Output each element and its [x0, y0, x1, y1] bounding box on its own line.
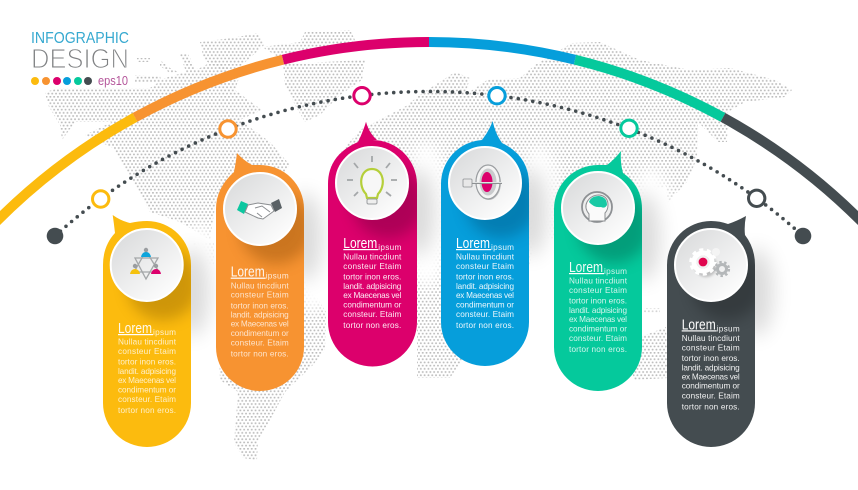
body text magenta: tortor non eros. — [343, 321, 401, 330]
body text yellow: ex Maecenas vel — [118, 376, 176, 385]
capsule yellow — [103, 215, 191, 447]
capsule blue — [441, 121, 529, 366]
body text orange: ex Maecenas vel — [231, 320, 289, 329]
capsule magenta — [328, 122, 417, 366]
body text dark: condimentum or — [682, 382, 740, 391]
circle shadow magenta — [352, 166, 424, 238]
arc segment blue — [429, 42, 575, 60]
panel: blue — [441, 121, 537, 366]
icon disc yellow — [111, 229, 183, 301]
body text green: tortor inon eros. — [569, 297, 627, 306]
body text orange — [231, 281, 289, 359]
body text magenta: condimentum or — [343, 300, 402, 309]
body text magenta: landit. adpisicing — [343, 282, 402, 291]
body text yellow: condimentum or — [118, 385, 176, 394]
panel: yellow — [103, 215, 199, 447]
dotted world map — [45, 30, 792, 460]
heading magenta: Lorem — [343, 235, 377, 252]
colour dots legend — [31, 77, 92, 85]
ring magenta — [354, 88, 370, 104]
icon disc green — [562, 172, 634, 244]
body text dark: ex Maecenas vel — [682, 372, 740, 381]
ring blue — [489, 88, 505, 104]
body text orange: tortor inon eros. — [231, 301, 289, 310]
body text dark: landit. adpisicing — [682, 363, 740, 372]
body text magenta: tortor inon eros. — [343, 273, 401, 282]
heading orange: ipsum — [266, 272, 289, 281]
ring orange — [220, 121, 236, 137]
heading blue: Lorem — [456, 235, 490, 252]
circle shadow green — [578, 191, 650, 263]
timeline rings — [92, 88, 765, 207]
body text magenta: consteur Etaim — [343, 262, 401, 271]
body text blue: ex Maecenas vel — [456, 291, 514, 300]
icon: gears — [691, 248, 729, 277]
title: infographic: INFOGRAPHIC — [31, 30, 129, 47]
body text green: tortor non eros. — [569, 345, 627, 354]
body text yellow: Nullau tincdiunt — [118, 338, 177, 347]
body text green: landit. adpisicing — [569, 306, 627, 315]
ring dark — [748, 190, 765, 206]
body text green: consteur. Etaim — [569, 334, 627, 343]
capsule outer shadows — [175, 143, 789, 365]
body text yellow: tortor non eros. — [118, 406, 176, 415]
body text dark: consteur Etaim — [682, 343, 740, 352]
body text green: condimentum or — [569, 324, 627, 333]
panel: dark — [667, 216, 763, 447]
body text orange: tortor non eros. — [231, 350, 289, 359]
icon: handshake — [237, 199, 282, 219]
body text blue: landit. adpisicing — [456, 282, 514, 291]
icon disc blue — [449, 147, 521, 219]
body text blue: consteur. Etaim — [456, 310, 514, 319]
body text magenta: consteur. Etaim — [343, 310, 401, 319]
heading dark: ipsum — [717, 324, 740, 333]
panel: magenta — [328, 122, 424, 366]
body text orange: consteur Etaim — [231, 291, 289, 300]
ring green — [621, 120, 637, 136]
body text dark: tortor non eros. — [682, 402, 740, 411]
timeline end dot right — [795, 228, 811, 244]
icon: target with arrow — [463, 165, 502, 200]
icon: light bulb — [347, 156, 397, 204]
body text yellow: consteur. Etaim — [118, 395, 176, 404]
heading yellow: Lorem — [118, 320, 152, 337]
body text magenta: Nullau tincdiunt — [343, 253, 402, 262]
body text dark — [682, 334, 740, 411]
body text orange: landit. adpisicing — [231, 311, 289, 320]
heading yellow: ipsum — [153, 328, 176, 337]
heading orange: Lorem — [231, 264, 265, 281]
circle shadow orange — [240, 192, 312, 264]
body text dark: tortor inon eros. — [682, 354, 740, 363]
body text blue: condimentum or — [456, 300, 514, 309]
icon: head with brain — [582, 192, 612, 222]
title block — [31, 30, 129, 88]
capsule green — [554, 151, 642, 391]
body text blue: tortor inon eros. — [456, 273, 514, 282]
heading dark: Lorem — [682, 316, 716, 333]
body text blue: consteur Etaim — [456, 262, 514, 271]
ring yellow — [92, 191, 109, 207]
body text orange: consteur. Etaim — [231, 339, 289, 348]
circle shadow yellow — [127, 248, 199, 320]
arc segment yellow — [0, 117, 135, 228]
body text green: consteur Etaim — [569, 286, 627, 295]
colored header arc — [0, 42, 858, 228]
capsule orange — [216, 153, 304, 391]
body text green: ex Maecenas vel — [569, 315, 627, 324]
body text orange: condimentum or — [231, 329, 289, 338]
body text orange: Nullau tincdiunt — [231, 281, 289, 290]
heading green: ipsum — [604, 267, 627, 276]
body text magenta: ex Maecenas vel — [343, 291, 401, 300]
icon disc magenta — [336, 147, 408, 219]
heading blue: ipsum — [491, 243, 514, 252]
arc segment magenta — [283, 42, 429, 60]
icon disc orange — [224, 173, 296, 245]
heading magenta: ipsum — [378, 243, 401, 252]
icon: atom people — [130, 248, 161, 279]
arc segment dark — [723, 117, 858, 228]
heading green: Lorem — [569, 259, 603, 276]
body text magenta — [343, 253, 402, 330]
circle shadow dark — [694, 254, 755, 320]
body text yellow: tortor inon eros. — [118, 358, 176, 367]
dotted timeline arc — [55, 91, 803, 236]
body text blue: tortor non eros. — [456, 321, 514, 330]
body text dark: consteur. Etaim — [682, 391, 740, 400]
eps10 label: eps10 — [98, 73, 128, 88]
body text yellow: consteur Etaim — [118, 347, 176, 356]
body text green: Nullau tincdiunt — [569, 277, 628, 286]
timeline end dot left — [47, 228, 63, 244]
body text green — [569, 277, 628, 354]
body text blue — [456, 253, 515, 330]
title: design: DESIGN — [31, 43, 129, 74]
body text yellow — [118, 338, 177, 415]
icon disc dark — [675, 229, 747, 301]
capsule dark — [667, 216, 755, 447]
body text dark: Nullau tincdiunt — [682, 334, 740, 343]
body text blue: Nullau tincdiunt — [456, 253, 515, 262]
body text yellow: landit. adpisicing — [118, 367, 176, 376]
circle shadow blue — [465, 166, 537, 238]
arc segment orange — [135, 60, 283, 117]
panel: green — [554, 151, 650, 391]
arc segment green — [575, 60, 723, 117]
panel: orange — [216, 153, 312, 391]
